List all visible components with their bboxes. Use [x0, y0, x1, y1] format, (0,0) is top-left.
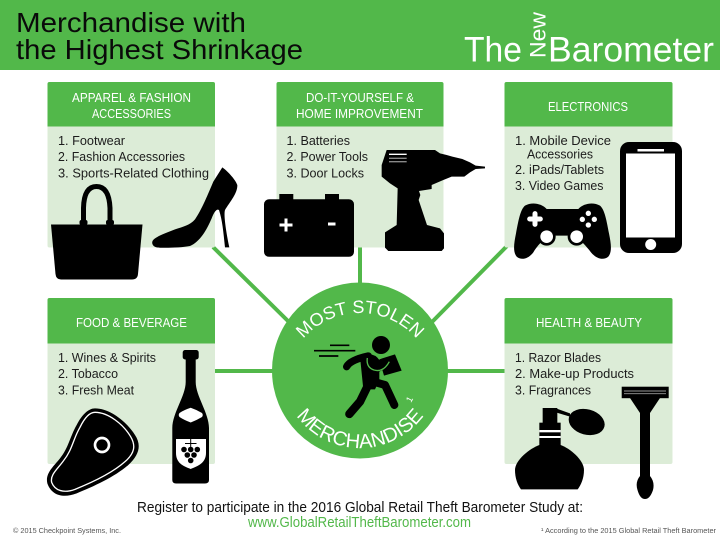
title: [16, 7, 303, 65]
icon: car battery: [264, 194, 354, 257]
badge text: most stolen: MOST STOLEN: [296, 300, 424, 338]
panel: apparel and fashion accessories: ACCESSORIES: [92, 106, 171, 121]
panel: health and beauty: 1. Razor Blades: [515, 350, 601, 365]
icon: handbag: [51, 186, 142, 280]
panel: food and beverage: 1. Wines & Spirits: [58, 350, 156, 365]
panel: food and beverage: 2. Tobacco: [58, 366, 118, 381]
panel: electronics: [504, 82, 672, 248]
logo: The New Barometer: New: [526, 12, 550, 58]
panel: apparel and fashion accessories: [48, 82, 215, 248]
panel: electronics: ELECTRONICS: [548, 99, 628, 114]
logo: The New Barometer: The: [464, 30, 522, 70]
title: Merchandise with: [16, 7, 246, 38]
icon: wine bottle: [172, 350, 209, 484]
registration call to action: Register to participate in the 2016 Global Retail Theft Barometer Study at:: [137, 499, 583, 516]
icon: razor: [622, 387, 669, 499]
panel: health and beauty: [504, 298, 672, 464]
panel: health and beauty: HEALTH & BEAUTY: [536, 315, 642, 330]
logo: The New Barometer: Barometer: [548, 30, 714, 70]
panel: electronics: 3. Video Games: [515, 178, 604, 193]
panel: health and beauty: 2. Make-up Products: [515, 366, 634, 381]
panel: do-it-yourself and home improvement: DO-IT-YOURSELF &: [306, 90, 414, 105]
center circle badge: [272, 282, 448, 458]
panel: apparel and fashion accessories: 1. Footwear: [58, 133, 126, 148]
panel: apparel and fashion accessories: 2. Fashion Accessories: [58, 149, 185, 164]
panel: electronics: 2. iPads/Tablets: [515, 162, 604, 177]
panel: do-it-yourself and home improvement: HOME IMPROVEMENT: [296, 106, 423, 121]
icon: high heel shoe: [152, 167, 237, 248]
footnote marker: 1: [404, 395, 415, 404]
badge text: merchandise: MERCHANDISE: [297, 408, 424, 448]
panel: apparel and fashion accessories: 3. Sports-Related Clothing: [58, 166, 209, 180]
panel: electronics: Accessories: [527, 146, 593, 162]
panel: health and beauty: 3. Fragrances: [515, 382, 591, 398]
panel: do-it-yourself and home improvement: 3. Door Locks: [286, 166, 364, 180]
panel: electronics: 1. Mobile Device: [515, 133, 611, 148]
logo: The New Barometer: [464, 12, 714, 70]
panel: apparel and fashion accessories: APPAREL & FASHION: [72, 90, 191, 105]
icon: perfume bottle: [515, 405, 608, 489]
connector lines: [213, 246, 507, 371]
copyright: © 2015 Checkpoint Systems, Inc.: [13, 527, 121, 535]
title: the Highest Shrinkage: [16, 34, 303, 65]
website url: www.GlobalRetailTheftBarometer.com: [247, 514, 471, 531]
icon: running thief: [314, 336, 402, 414]
icon: game controller: [514, 203, 611, 259]
icon: power drill: [382, 150, 485, 251]
header band: [0, 0, 720, 70]
panel: do-it-yourself and home improvement: 2. Power Tools: [286, 149, 368, 164]
footnote: ¹ According to the 2015 Global Retail Theft Barometer: [541, 528, 717, 535]
panel: food and beverage: FOOD & BEVERAGE: [76, 315, 187, 330]
panel: food and beverage: [48, 298, 215, 464]
icon: smartphone: [620, 142, 682, 253]
icon: steak: [47, 408, 139, 496]
panel: do-it-yourself and home improvement: [276, 82, 444, 248]
panel: do-it-yourself and home improvement: 1. Batteries: [286, 133, 350, 148]
panel: food and beverage: 3. Fresh Meat: [58, 382, 134, 398]
